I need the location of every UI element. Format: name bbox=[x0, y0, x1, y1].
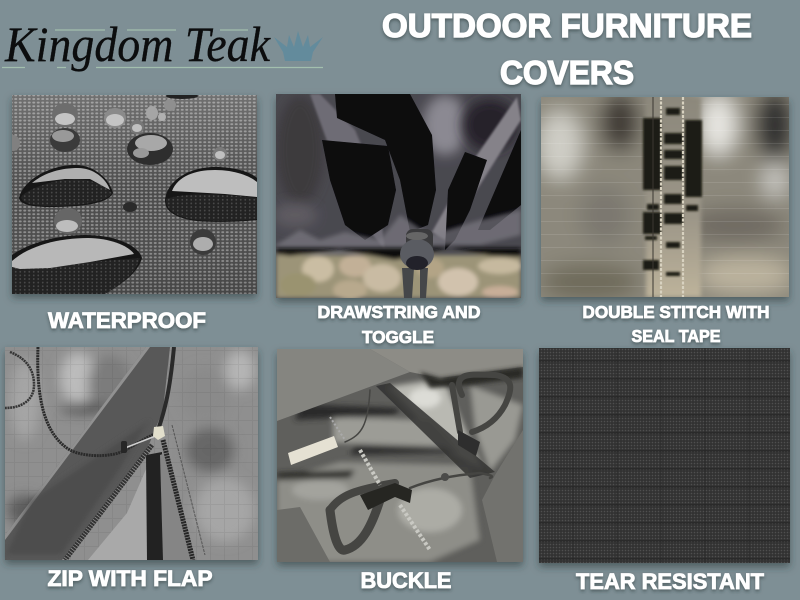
large water drop right bbox=[165, 167, 257, 222]
label: double stitch with seal tape bbox=[582, 302, 770, 346]
inner lining bbox=[88, 467, 149, 560]
stones bbox=[276, 248, 522, 300]
silver fabric folds bbox=[277, 378, 523, 562]
large water drop bottom bbox=[12, 235, 142, 294]
panel: double stitch with seal tape photo bbox=[536, 96, 794, 306]
double stitch lines bbox=[661, 97, 683, 297]
label: double stitch with seal tape: DOUBLE STITCH WITH bbox=[582, 302, 770, 322]
title: COVERS bbox=[500, 54, 634, 91]
gathered hem bbox=[276, 210, 521, 258]
logo: Kingdom Teak bbox=[2, 16, 323, 72]
white tag bbox=[288, 436, 338, 465]
buckle clips bbox=[458, 430, 480, 456]
seal tape seam bbox=[643, 97, 702, 297]
panel: tear resistant photo bbox=[539, 348, 790, 563]
label: waterproof: WATERPROOF bbox=[48, 308, 206, 333]
label: buckle: BUCKLE bbox=[360, 568, 452, 593]
panel: buckle photo bbox=[277, 349, 523, 562]
label: drawstring and toggle bbox=[318, 302, 480, 347]
zip flap bbox=[5, 347, 170, 560]
label: drawstring and toggle: DRAWSTRING AND bbox=[318, 302, 480, 322]
label: tear resistant: TEAR RESISTANT bbox=[576, 569, 765, 594]
icon: crown bbox=[274, 31, 323, 61]
title bbox=[382, 7, 752, 91]
label: zip with flap: ZIP WITH FLAP bbox=[48, 566, 212, 591]
black fabric folds bbox=[322, 94, 521, 250]
large water drop left bbox=[19, 165, 113, 207]
small water drops bbox=[6, 99, 227, 255]
icon: zip puller bbox=[153, 426, 165, 440]
stitched repair bbox=[360, 450, 430, 550]
straps and buckles bbox=[330, 375, 510, 550]
panel: zip with flap photo bbox=[5, 347, 258, 560]
fabric flaps bbox=[277, 349, 410, 421]
title: OUTDOOR FURNITURE bbox=[382, 7, 752, 44]
panel: waterproof photo bbox=[6, 93, 257, 294]
icon: toggle bbox=[400, 229, 434, 298]
label: double stitch with seal tape: SEAL TAPE bbox=[632, 326, 720, 346]
label: drawstring and toggle: TOGGLE bbox=[362, 327, 434, 347]
panel: drawstring and toggle photo bbox=[273, 94, 522, 300]
logo wordmark: Kingdom Teak bbox=[4, 16, 271, 72]
drawcord bbox=[38, 347, 157, 456]
zipper teeth bbox=[158, 347, 174, 430]
